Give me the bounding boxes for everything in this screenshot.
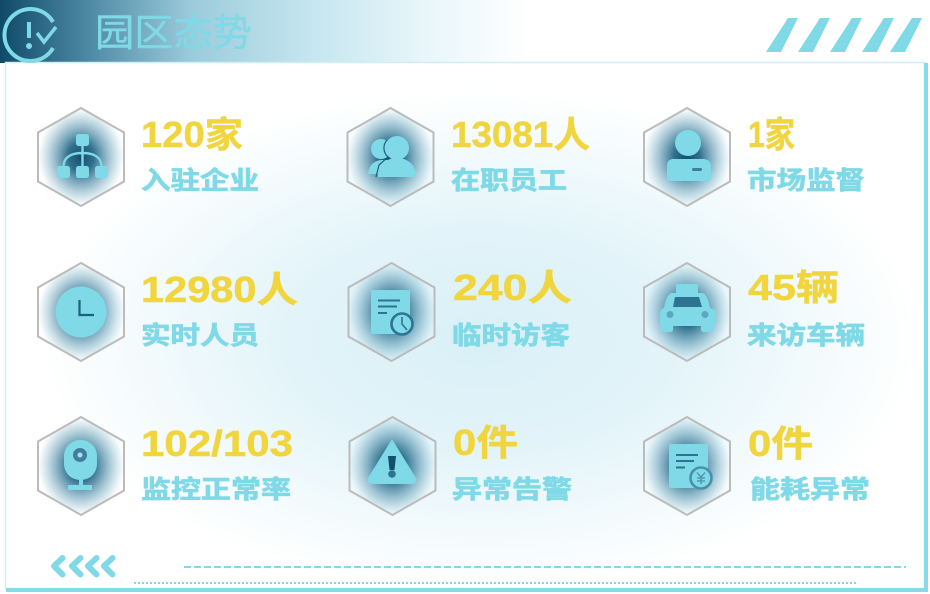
dashed line <box>184 566 906 568</box>
icon: clock <box>56 286 106 338</box>
value: 1家 <box>748 114 795 155</box>
value: 240人 <box>453 267 572 308</box>
value: 0件 <box>453 422 518 463</box>
label: 市场监督 <box>747 161 865 197</box>
icon: chevrons <box>54 558 112 574</box>
label: 在职员工 <box>451 161 567 197</box>
label: 入驻企业 <box>141 161 259 197</box>
label: 异常告警 <box>452 470 572 506</box>
stat: 在职员工 <box>348 108 590 206</box>
dotted line <box>134 582 856 584</box>
icon: visitor document with clock <box>371 290 412 334</box>
label: 监控正常率 <box>141 470 291 506</box>
stat: 市场监督 <box>644 108 865 206</box>
stat: 能耗异常 <box>644 417 870 515</box>
decorative stripes <box>766 18 922 52</box>
value: 102/103 <box>141 423 293 464</box>
stat: 来访车辆 <box>644 263 865 361</box>
value: 45辆 <box>748 267 839 308</box>
label: 能耗异常 <box>750 470 870 506</box>
icon: warning triangle <box>368 441 416 483</box>
value: 120家 <box>141 114 243 155</box>
stat: 入驻企业 <box>38 108 259 206</box>
icon: alert clock logo <box>4 9 56 61</box>
icon: taxi <box>660 284 716 332</box>
stat: 监控正常率 <box>38 417 293 515</box>
icon: supervisor <box>667 130 711 181</box>
icon: camera <box>64 440 97 490</box>
stat: 异常告警 <box>350 417 572 515</box>
label: 临时访客 <box>452 316 570 352</box>
value: 12980人 <box>141 269 298 310</box>
value: 13081人 <box>451 114 590 155</box>
icon: people <box>368 136 416 177</box>
icon: energy bill <box>669 444 712 488</box>
title: 园区态势 <box>95 2 252 57</box>
stat: 实时人员 <box>38 263 298 361</box>
icon: organisation tree <box>57 134 108 178</box>
stat: 临时访客 <box>348 263 572 361</box>
value: 0件 <box>748 423 813 464</box>
header band <box>0 0 530 63</box>
label: 实时人员 <box>141 316 259 352</box>
label: 来访车辆 <box>747 316 865 352</box>
